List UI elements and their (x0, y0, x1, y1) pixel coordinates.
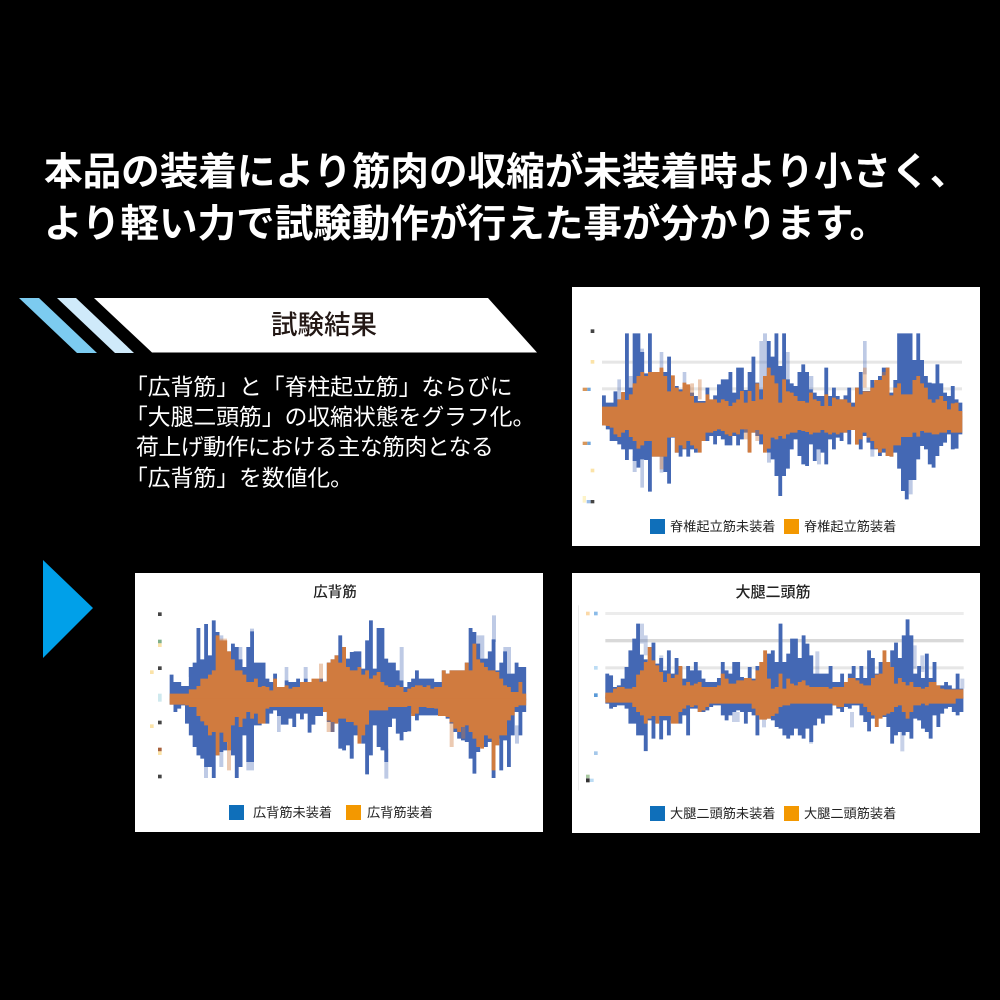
title (44, 151, 968, 246)
chart: latissimus dorsi waveform (150, 612, 526, 779)
chart heading: 広背筋 (313, 585, 357, 601)
panel: latissimus dorsi chart (135, 573, 543, 832)
legend: worn: 広背筋装着 (367, 805, 433, 820)
legend: not worn: 脊椎起立筋未装着 (670, 519, 776, 534)
legend: worn: 脊椎起立筋装着 (804, 519, 896, 534)
panel: erector spinae chart (572, 287, 980, 546)
chart heading: 大腿二頭筋 (735, 584, 810, 601)
title: より軽い力で試験動作が行えた事が分かります。 (44, 203, 888, 246)
legend: not worn: 広背筋未装着 (253, 805, 332, 820)
description text: 「大腿二頭筋」の収縮状態をグラフ化。 (125, 404, 535, 430)
banner heading: 試験結果 (271, 310, 377, 340)
legend: worn: 大腿二頭筋装着 (804, 806, 896, 821)
description text (125, 374, 535, 490)
arrow pointing to latissimus chart (43, 560, 93, 658)
chart: biceps femoris waveform (578, 605, 964, 790)
section banner: test results (19, 298, 537, 353)
description text: 「広背筋」と「脊柱起立筋」ならびに (125, 374, 513, 400)
legend: not worn: 大腿二頭筋未装着 (670, 806, 776, 821)
description text: 「広背筋」を数値化。 (125, 464, 353, 490)
panel: biceps femoris chart (572, 573, 980, 833)
chart: erector spinae waveform (582, 329, 962, 504)
description text: 荷上げ動作における主な筋肉となる (136, 434, 493, 460)
title: 本品の装着により筋肉の収縮が未装着時より小さく、 (44, 151, 968, 194)
